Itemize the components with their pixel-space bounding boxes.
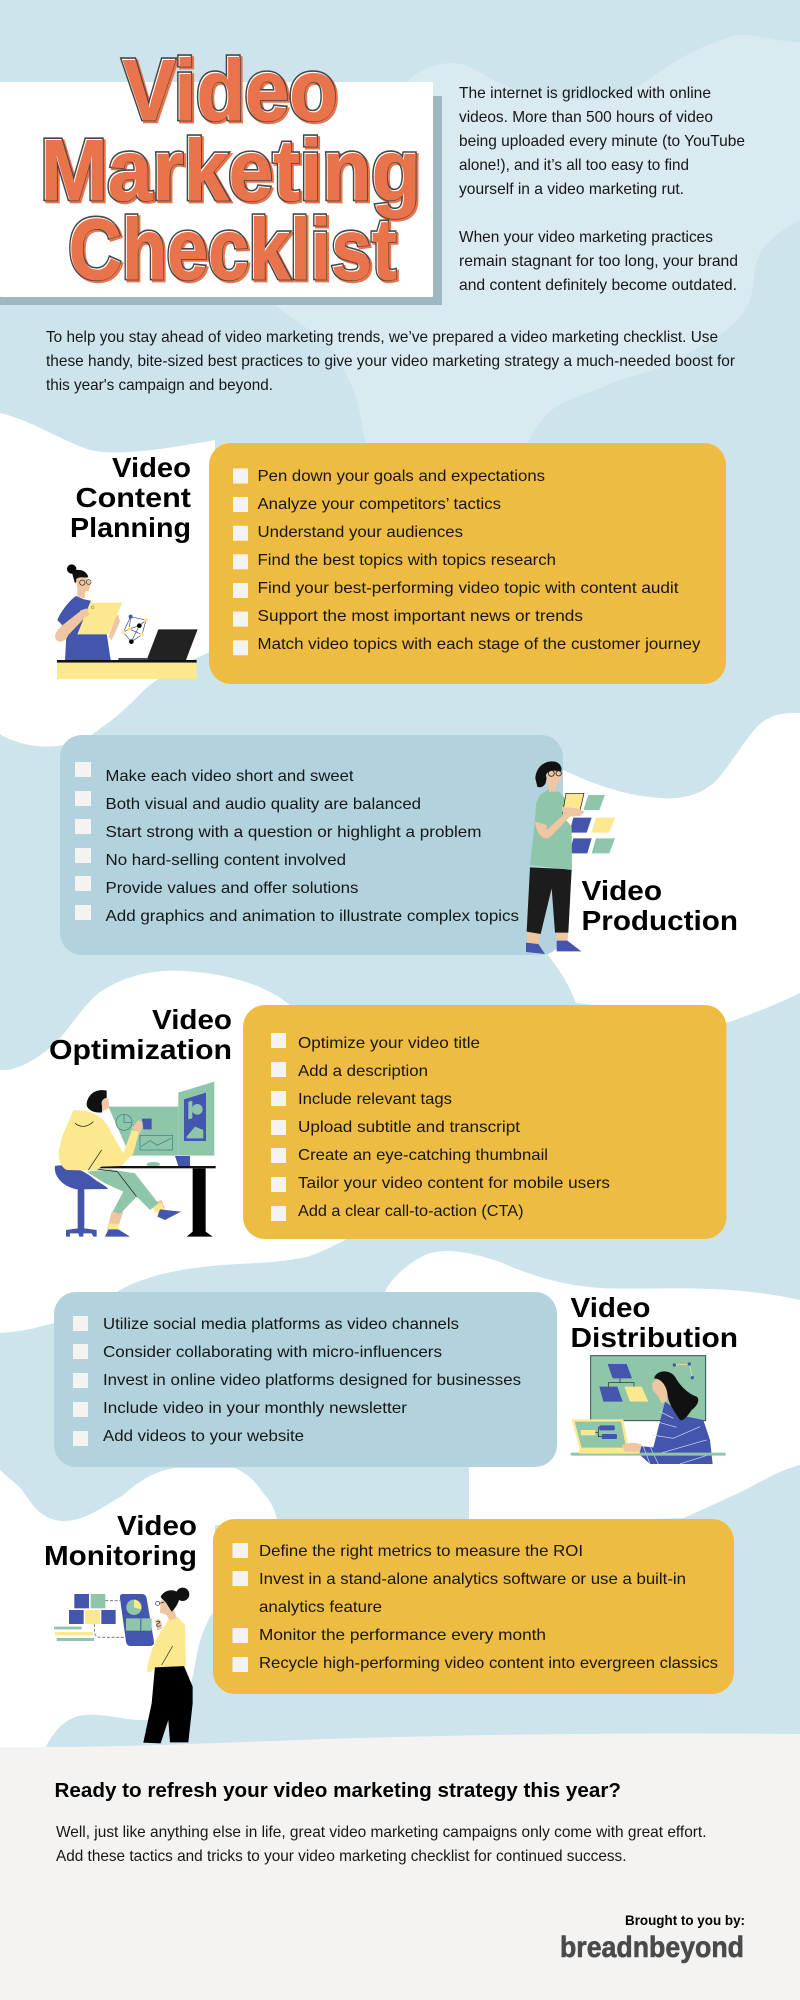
title: Marketing: [42, 124, 422, 220]
panel: video distribution: Utilize social media platforms as video channels: [103, 1316, 459, 1333]
heading: video production: Video: [582, 875, 662, 906]
title: Checklist: [68, 201, 396, 297]
panel: video monitoring: [213, 1519, 734, 1694]
panel: video content planning: [209, 443, 726, 684]
footer text: Well, just like anything else in life, great video marketing campaigns only come with great effort.: [56, 1824, 706, 1841]
panel: video production: Both visual and audio quality are balanced: [106, 796, 421, 813]
panel: video production: Provide values and offer solutions: [106, 880, 358, 897]
intro text: and content definitely become outdated.: [459, 277, 737, 294]
intro text: yourself in a video marketing rut.: [459, 181, 684, 198]
panel: video distribution: Include video in your monthly newsletter: [103, 1400, 408, 1417]
title: Marketing: [41, 123, 421, 219]
illustration: woman presenting flowchart at laptop: [571, 1356, 726, 1464]
panel: video content planning: Find your best-performing video topic with content audit: [258, 580, 679, 597]
intro text: [459, 85, 745, 294]
panel: video optimization: Add a clear call-to-action (CTA): [298, 1203, 524, 1220]
intro text: When your video marketing practices: [459, 229, 713, 246]
panel: video content planning: Support the most important news or trends: [258, 608, 583, 625]
panel: video monitoring: Define the right metrics to measure the ROI: [259, 1543, 583, 1560]
title: Checklist: [69, 202, 397, 298]
intro text: alone!), and it’s all too easy to find: [459, 157, 689, 174]
panel: video optimization: [243, 1005, 726, 1239]
panel: video monitoring: Invest in a stand-alone analytics software or use a built-in: [259, 1571, 686, 1588]
title: Checklist: [68, 201, 396, 297]
heading: video content planning: Content: [76, 482, 191, 513]
panel: video distribution: Invest in online video platforms designed for businesses: [103, 1372, 521, 1389]
lead paragraph: To help you stay ahead of video marketing trends, we’ve prepared a video marketing checklist. Use: [46, 329, 718, 346]
panel: video content planning: Understand your audiences: [258, 524, 463, 541]
heading: video distribution: Distribution: [570, 1322, 738, 1353]
heading: video distribution: [570, 1292, 738, 1353]
illustration: woman with analytics tablet: [54, 1588, 193, 1743]
lead paragraph: these handy, bite-sized best practices to give your video marketing strategy a much-needed boost for: [46, 353, 736, 370]
title: Video: [122, 42, 337, 138]
panel: video production: Make each video short and sweet: [106, 768, 354, 785]
panel: video distribution: Consider collaborating with micro-influencers: [103, 1344, 442, 1361]
title: Video: [122, 42, 337, 138]
panel: video monitoring: Monitor the performance every month: [259, 1627, 546, 1644]
panel: video distribution: [54, 1292, 557, 1467]
title: [40, 42, 422, 299]
heading: video monitoring: Monitoring: [44, 1540, 197, 1571]
illustration: woman with clipboard and laptop: [55, 564, 198, 679]
title: Video: [123, 43, 338, 139]
panel: video optimization: Create an eye-catching thumbnail: [298, 1147, 548, 1164]
panel: video content planning: Pen down your goals and expectations: [258, 468, 545, 485]
lead paragraph: [46, 329, 736, 394]
title panel: [0, 82, 442, 305]
panel: video monitoring: Recycle high-performing video content into evergreen classics: [259, 1655, 718, 1672]
heading: video monitoring: [44, 1510, 197, 1571]
title: Marketing: [40, 122, 420, 218]
title: Checklist: [70, 203, 398, 299]
footer heading: Ready to refresh your video marketing strategy this year?: [54, 1780, 621, 1802]
title: Video: [124, 44, 339, 140]
heading: video production: [582, 875, 738, 936]
panel: video production: No hard-selling content involved: [106, 852, 346, 869]
heading: video content planning: Video: [112, 452, 191, 483]
intro text: being uploaded every minute (to YouTube: [459, 133, 745, 150]
panel: video optimization: Optimize your video title: [298, 1035, 480, 1052]
panel: video optimization: Add a description: [298, 1063, 428, 1080]
logo: breadnbeyond: breadnbeyond: [560, 1931, 744, 1964]
panel: video production: Start strong with a question or highlight a problem: [106, 824, 482, 841]
panel: video optimization: Include relevant tags: [298, 1091, 452, 1108]
heading: video optimization: Optimization: [49, 1034, 232, 1065]
illustration: person at desk with monitors: [55, 1082, 216, 1237]
panel: video production: Add graphics and animation to illustrate complex topics: [106, 908, 519, 925]
panel: video distribution: Add videos to your website: [103, 1428, 304, 1445]
footer text: [56, 1824, 706, 1865]
panel: video content planning: Find the best topics with topics research: [258, 552, 556, 569]
panel: video monitoring: analytics feature: [259, 1599, 382, 1616]
heading: video distribution: Video: [570, 1292, 650, 1323]
heading: video content planning: [70, 452, 191, 543]
heading: video optimization: [49, 1004, 232, 1065]
brought to you by: Brought to you by:: [625, 1912, 745, 1928]
panel: video optimization: Upload subtitle and transcript: [298, 1119, 521, 1136]
heading: video content planning: Planning: [70, 512, 191, 543]
intro text: remain stagnant for too long, your brand: [459, 253, 738, 270]
illustration: woman with tablet and tiles: [526, 761, 615, 954]
panel: video content planning: Analyze your competitors’ tactics: [258, 496, 501, 513]
lead paragraph: this year's campaign and beyond.: [46, 377, 273, 394]
panel: video production: [60, 735, 563, 955]
heading: video optimization: Video: [152, 1004, 232, 1035]
intro text: videos. More than 500 hours of video: [459, 109, 713, 126]
footer text: Add these tactics and tricks to your video marketing checklist for continued success.: [56, 1848, 626, 1865]
panel: video content planning: Match video topics with each stage of the customer journey: [258, 636, 700, 653]
panel: video optimization: Tailor your video content for mobile users: [298, 1175, 610, 1192]
intro text: The internet is gridlocked with online: [459, 85, 711, 102]
heading: video production: Production: [582, 905, 738, 936]
title: Marketing: [40, 122, 420, 218]
heading: video monitoring: Video: [117, 1510, 197, 1541]
